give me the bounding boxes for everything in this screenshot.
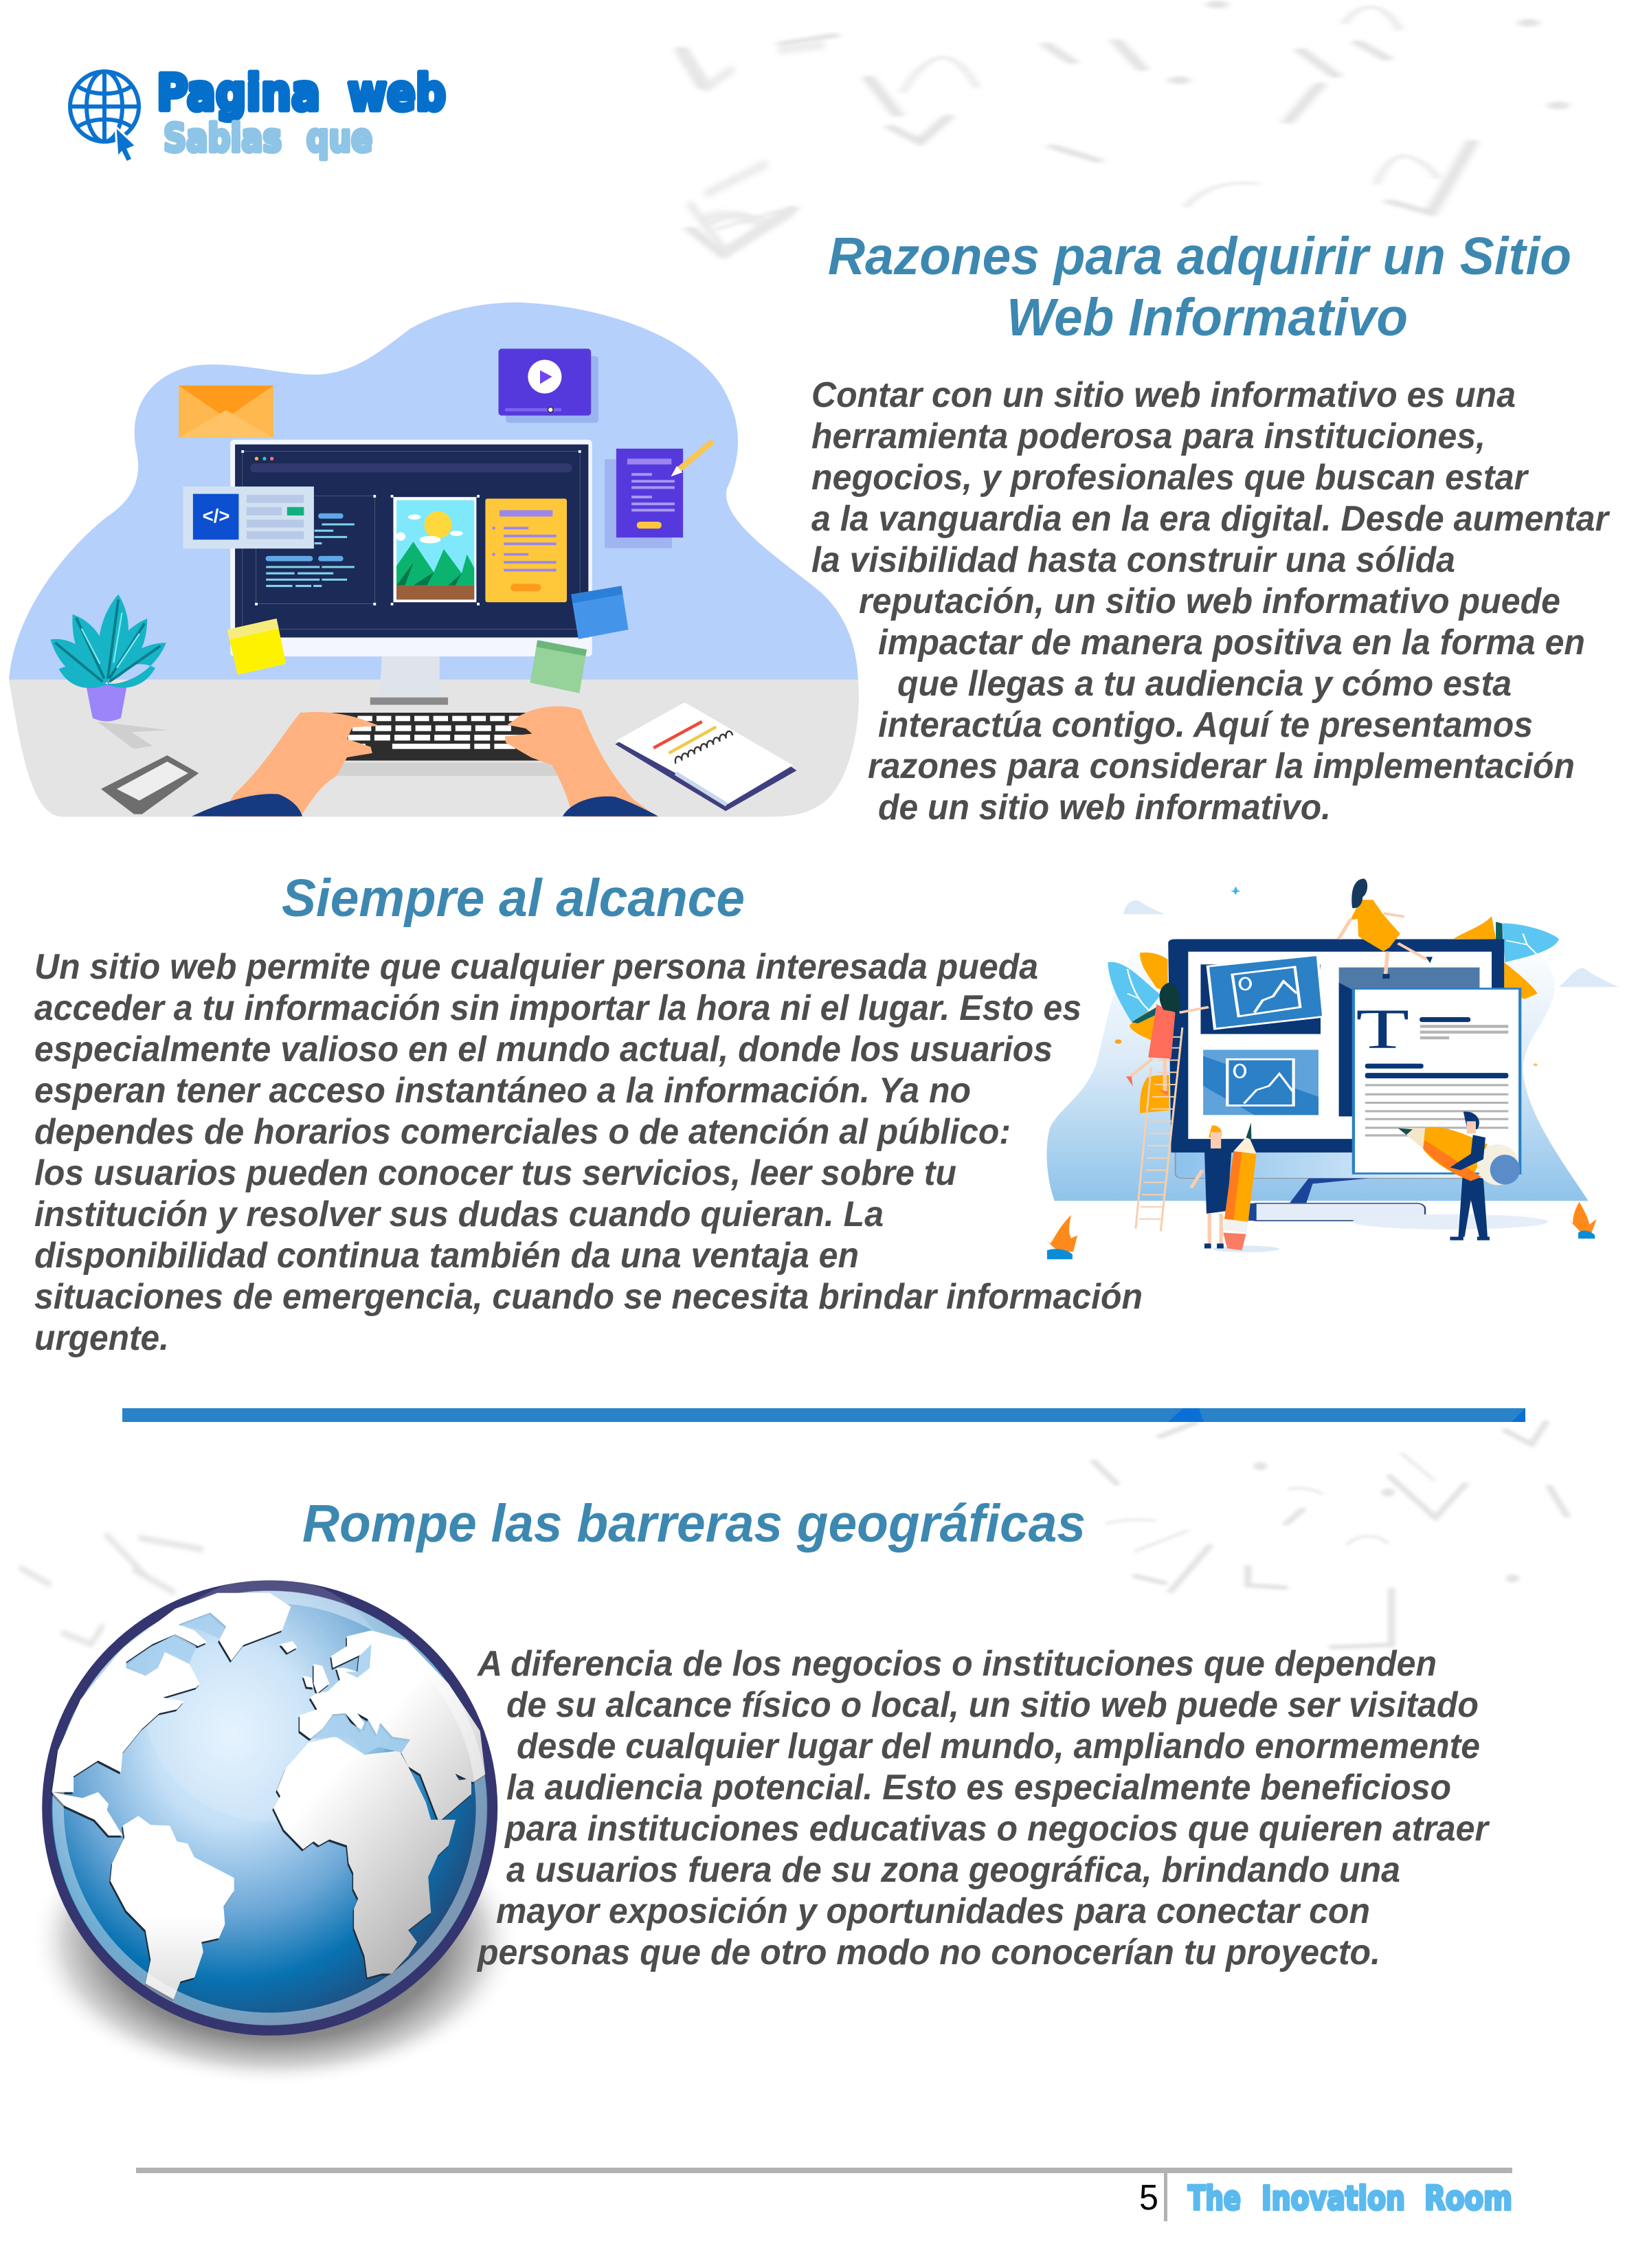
illustration: person typing at computer bbox=[9, 302, 859, 817]
body text: introduction: impactar de manera positiva en la forma en bbox=[878, 623, 1585, 663]
body text: Siempre al alcance: institución y resolver sus dudas cuando quieran. La bbox=[34, 1194, 884, 1234]
image cards bbox=[1200, 955, 1323, 1115]
clouds and sparkles bbox=[1115, 886, 1619, 1066]
body text: Rompe las barreras: para instituciones educativas o negocios que quieren atraer bbox=[504, 1809, 1490, 1849]
sticky notes bbox=[227, 586, 629, 693]
page number: 5 bbox=[1139, 2178, 1158, 2218]
decorative embossed texture near globe bbox=[19, 1534, 203, 1644]
code card: </> bbox=[203, 505, 229, 526]
phone bbox=[101, 755, 199, 814]
body text: Siempre al alcance: dependes de horarios comerciales o de atención al público: bbox=[34, 1112, 1011, 1152]
globe bbox=[30, 1577, 520, 2086]
person on ladder bbox=[1126, 983, 1209, 1232]
body text: Siempre al alcance: especialmente valioso en el mundo actual, donde los usuarios bbox=[34, 1030, 1053, 1069]
body text: Rompe las barreras bbox=[476, 1644, 1490, 1972]
body text: Rompe las barreras: desde cualquier lugar del mundo, ampliando enormemente bbox=[517, 1726, 1480, 1766]
logo: Pagina web / Sabias que: que bbox=[306, 116, 372, 161]
body text: introduction: interactúa contigo. Aquí te presentamos bbox=[878, 705, 1533, 745]
desk bbox=[9, 680, 859, 817]
keyboard bbox=[268, 713, 568, 776]
body text: Siempre al alcance: Un sitio web permite que cualquier persona interesada pueda bbox=[34, 947, 1038, 987]
body text: Rompe las barreras: mayor exposición y oportunidades para conectar con bbox=[496, 1891, 1370, 1931]
monitor bbox=[1168, 940, 1504, 1221]
decorative embossed texture bottom right bbox=[1094, 1423, 1567, 1647]
body text: introduction: razones para considerar la implementación bbox=[868, 746, 1575, 786]
heading: Siempre al alcance: Siempre al alcance bbox=[282, 869, 745, 928]
body text: introduction: a la vanguardia en la era digital. Desde aumentar bbox=[811, 499, 1611, 539]
monitor bbox=[230, 440, 592, 705]
footer rule bbox=[136, 2168, 1512, 2221]
hands bbox=[192, 707, 658, 817]
body text: introduction: la visibilidad hasta construir una sólida bbox=[811, 540, 1455, 580]
body text: Siempre al alcance: disponibilidad continua también da una ventaja en bbox=[34, 1236, 859, 1276]
footer brand: The Inovation Room: The bbox=[1188, 2179, 1241, 2218]
title: Razones para adquirir un Sitio bbox=[828, 227, 1571, 286]
plant bbox=[50, 594, 168, 749]
body text: Siempre al alcance bbox=[34, 947, 1143, 1358]
body text: introduction: que llegas a tu audiencia y cómo esta bbox=[897, 664, 1512, 704]
icon: video player bbox=[499, 348, 598, 423]
leaves bbox=[1108, 916, 1559, 1113]
text document: T bbox=[1356, 997, 1409, 1060]
body text: Rompe las barreras: la audiencia potencial. Esto es especialmente beneficioso bbox=[506, 1768, 1451, 1808]
heading: Rompe las barreras geográficas: Rompe las barreras geográficas bbox=[302, 1494, 1086, 1553]
yellow text card bbox=[485, 499, 567, 602]
globe rim bbox=[42, 1580, 497, 2036]
blue backdrop bbox=[1046, 942, 1589, 1201]
person sitting on monitor bbox=[1338, 878, 1433, 979]
continents bbox=[52, 1593, 485, 1999]
body text: Rompe las barreras: de su alcance físico o local, un sitio web puede ser visitado bbox=[506, 1685, 1479, 1725]
body text: introduction: reputación, un sitio web informativo puede bbox=[859, 581, 1560, 621]
code card bbox=[183, 487, 314, 548]
body text: Rompe las barreras: A diferencia de los negocios o instituciones que dependen bbox=[476, 1644, 1437, 1684]
flames bbox=[1046, 1202, 1597, 1259]
body text: introduction: negocios, y profesionales que buscan estar bbox=[811, 458, 1529, 498]
person with big pencil right bbox=[1352, 1111, 1548, 1241]
body text: introduction: de un sitio web informativo. bbox=[878, 788, 1331, 827]
body text: introduction bbox=[811, 375, 1611, 827]
decorative embossed texture top bbox=[682, 5, 1559, 254]
person with big pencil left bbox=[1191, 1122, 1279, 1252]
text document bbox=[1339, 968, 1520, 1173]
body text: introduction: Contar con un sitio web informativo es una bbox=[811, 375, 1516, 415]
title bbox=[828, 227, 1571, 347]
body text: Siempre al alcance: urgente. bbox=[34, 1318, 169, 1358]
logo subtitle: Sabias bbox=[164, 116, 282, 161]
title: Web Informativo bbox=[1007, 288, 1408, 347]
icon: envelope bbox=[179, 386, 273, 438]
body text: Rompe las barreras: personas que de otro modo no conocerían tu proyecto. bbox=[476, 1933, 1380, 1972]
body text: Siempre al alcance: situaciones de emergencia, cuando se necesita brindar información bbox=[34, 1277, 1143, 1317]
water tints and glass highlight bbox=[126, 1612, 410, 1755]
body text: Rompe las barreras: a usuarios fuera de su zona geográfica, brindando una bbox=[506, 1850, 1400, 1890]
logo title: Pagina bbox=[157, 64, 320, 122]
picture card bbox=[393, 497, 476, 602]
body text: Siempre al alcance: acceder a tu información sin importar la hora ni el lugar. Esto es bbox=[34, 988, 1081, 1028]
illustration: team building a web page bbox=[1046, 878, 1619, 1259]
body text: Siempre al alcance: los usuarios pueden conocer tus servicios, leer sobre tu bbox=[34, 1153, 956, 1193]
decorative embossed texture top left bbox=[681, 45, 824, 252]
icon: globe with cursor bbox=[70, 71, 139, 162]
ocean bbox=[52, 1591, 488, 2025]
blue blob background bbox=[9, 302, 858, 681]
footer brand: The Inovation Room: Inovation bbox=[1261, 2179, 1405, 2218]
notebook bbox=[615, 702, 796, 811]
globe shadow bbox=[30, 1794, 520, 2086]
body text: introduction: herramienta poderosa para instituciones, bbox=[811, 416, 1485, 456]
divider bar bbox=[122, 1408, 1525, 1422]
footer brand: The Inovation Room bbox=[1188, 2179, 1512, 2218]
icon: document with pencil bbox=[605, 443, 711, 548]
footer brand: The Inovation Room: Room bbox=[1424, 2179, 1512, 2218]
body text: Siempre al alcance: esperan tener acceso instantáneo a la información. Ya no bbox=[34, 1071, 971, 1111]
logo: Pagina web / Sabias que bbox=[70, 64, 446, 162]
logo: Pagina web / Sabias que: web bbox=[348, 64, 446, 122]
